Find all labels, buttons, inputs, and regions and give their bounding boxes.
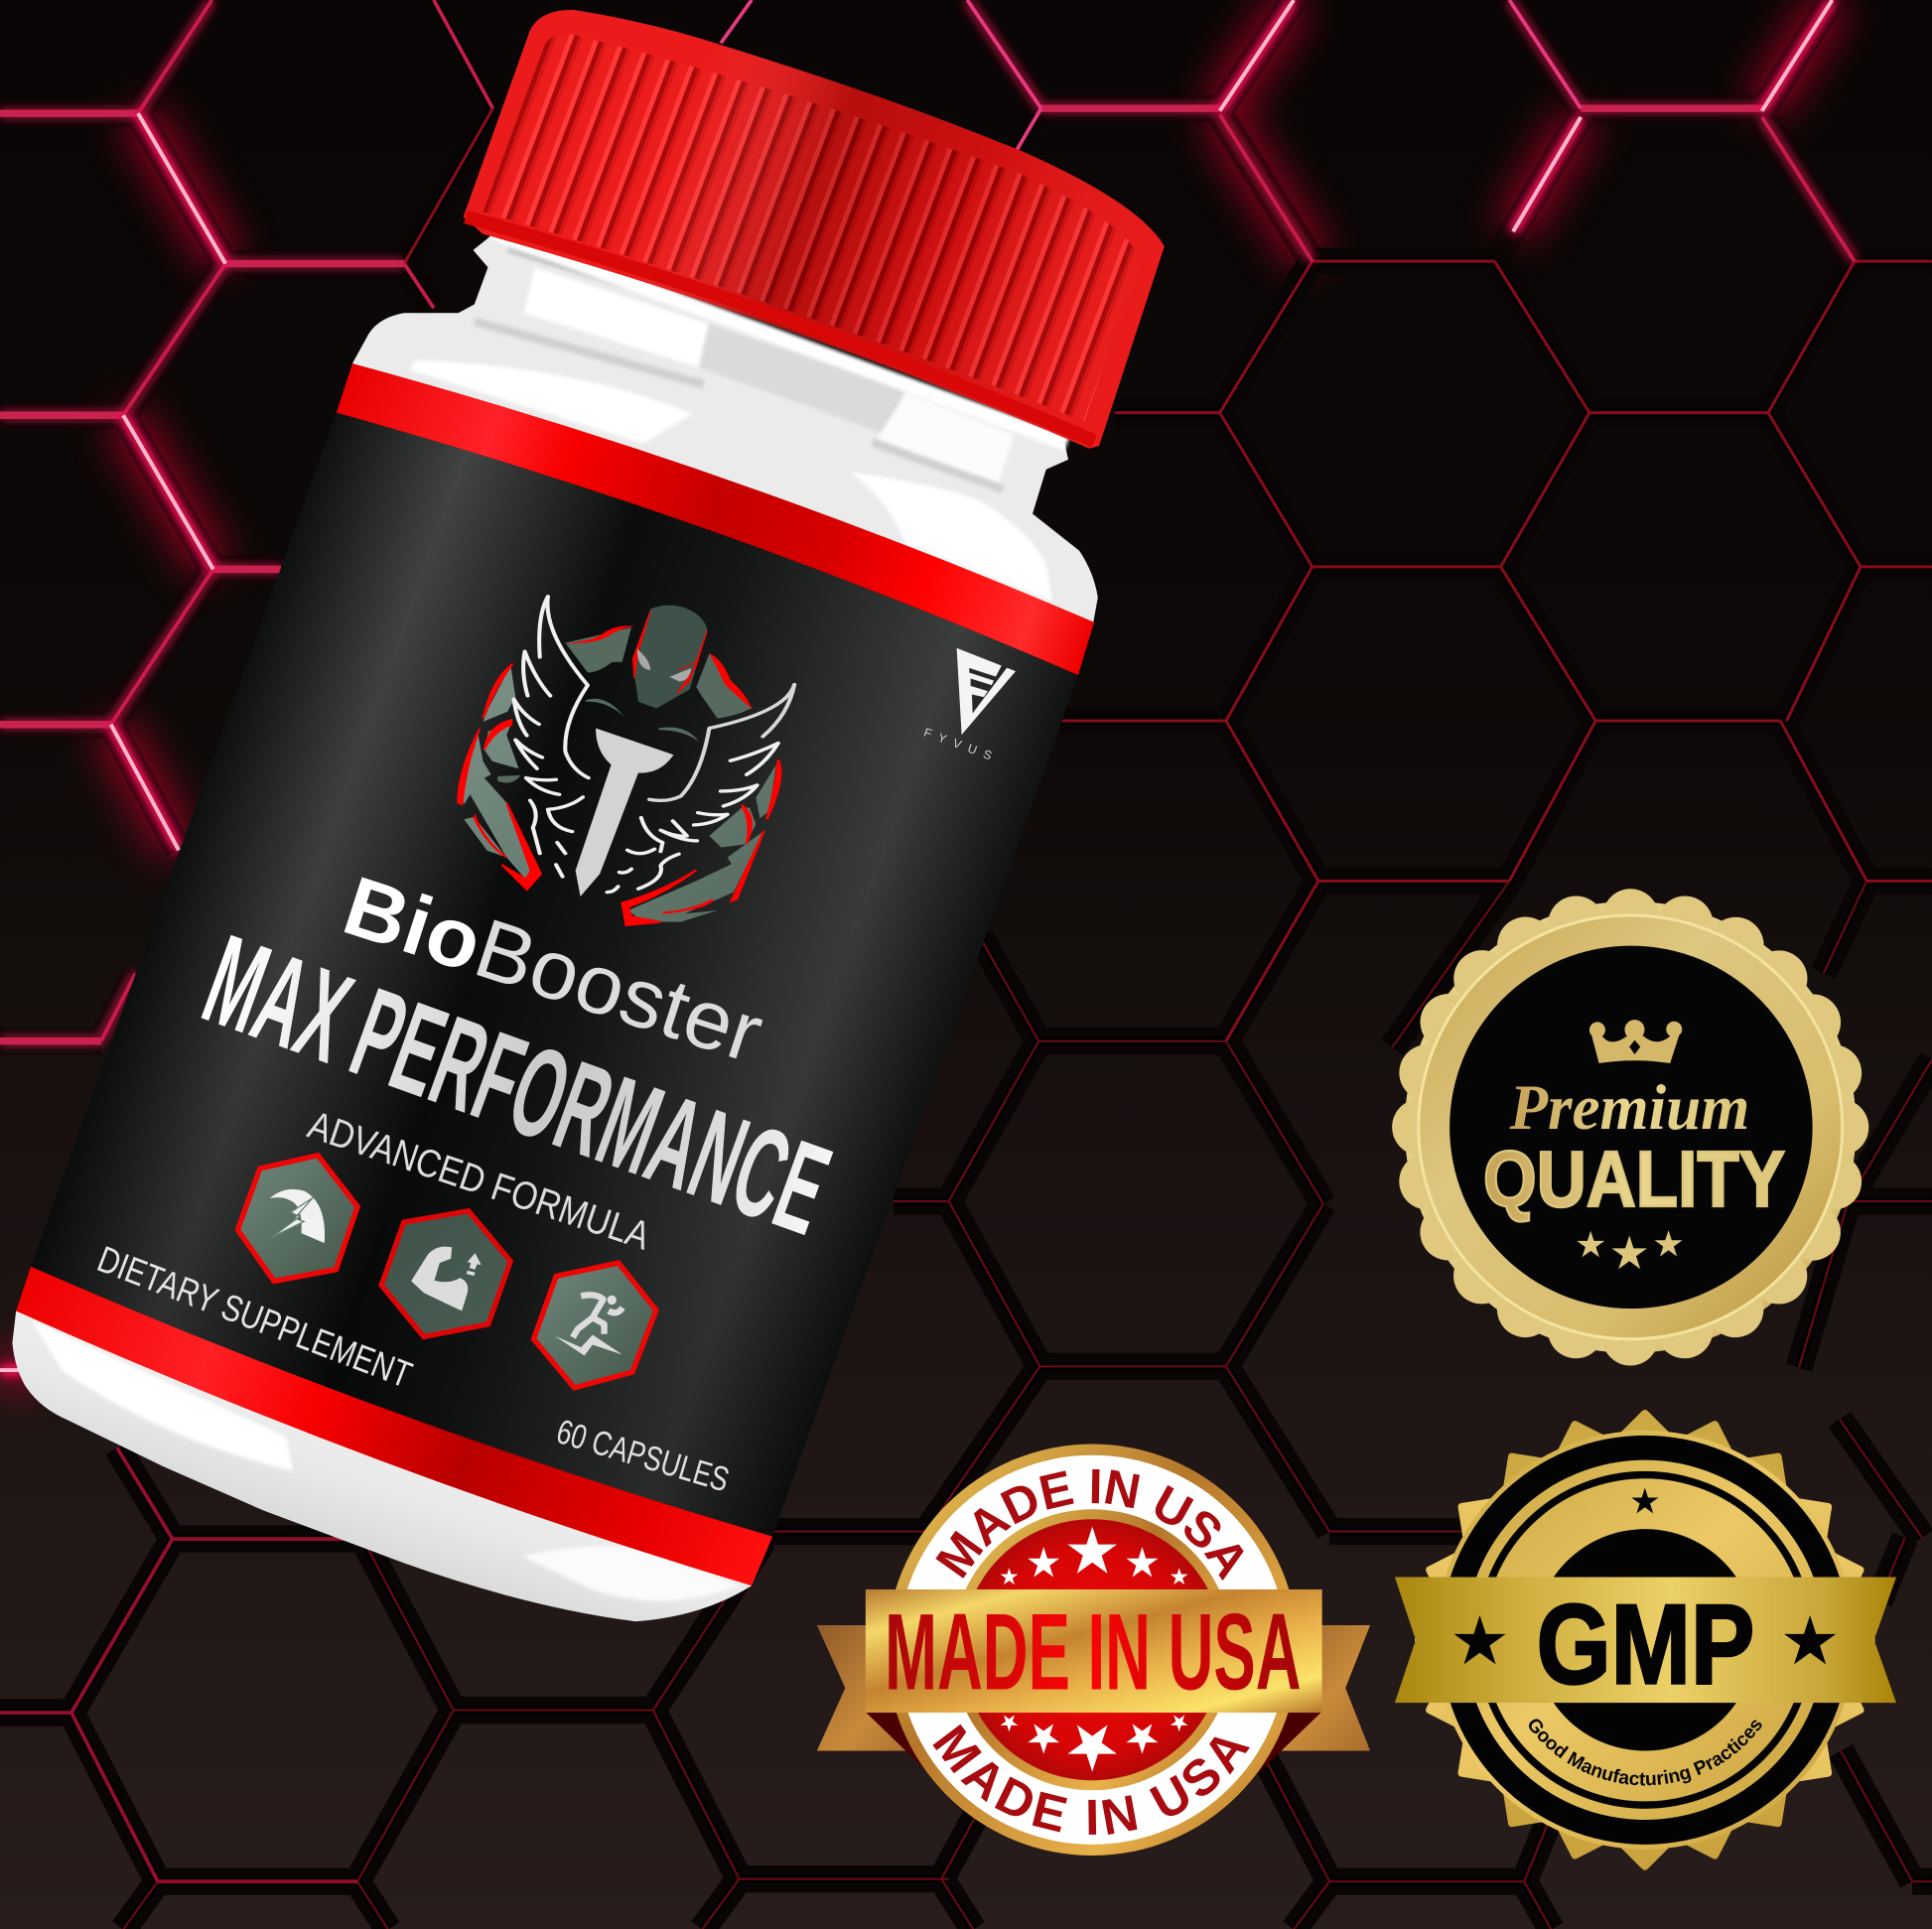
product name: MAX PERFORMANCE: MAX PERFORMANCE	[188, 908, 846, 1262]
black center disc	[1449, 946, 1813, 1309]
warrior right arm	[622, 759, 780, 925]
logo: winged warrior and nail	[458, 597, 794, 925]
FYVUS triangle icon	[957, 648, 1016, 735]
bottle neck and shoulders	[352, 221, 1098, 624]
icon: energy helmet with lightning	[237, 1156, 357, 1281]
red center	[962, 1519, 1223, 1780]
text: QUALITY: QUALITY	[1483, 1135, 1785, 1223]
badge: Made in USA	[816, 1444, 1370, 1856]
gold ring	[1465, 1460, 1825, 1820]
ribbon stars	[1454, 1615, 1836, 1664]
white ring	[897, 1455, 1287, 1845]
gold inner ring	[1419, 915, 1843, 1339]
benefit icons row	[237, 1156, 656, 1388]
text: MADE IN USA: MADE IN USA	[885, 1591, 1302, 1713]
brand mark: FYVUS	[922, 648, 1016, 762]
gold outer ring	[887, 1445, 1298, 1856]
medium neon edges	[0, 0, 1855, 1041]
text: GMP: GMP	[1537, 1582, 1754, 1708]
curved text bottom: MADE IN USA	[933, 1723, 1250, 1835]
three stars	[1577, 1230, 1683, 1269]
badge: GMP	[1394, 1410, 1896, 1870]
FYVUS wordmark: FYVUS	[922, 726, 994, 762]
curved text top: MADE IN USA	[935, 1469, 1244, 1581]
top star	[1631, 1488, 1658, 1513]
badge: Premium Quality	[1405, 901, 1857, 1353]
product name: BioBooster: BioBooster	[334, 859, 773, 1080]
thin black ring	[1480, 1475, 1810, 1805]
bright neon edges	[0, 0, 1832, 1370]
back ribbon	[817, 1625, 1370, 1780]
subtitle: ADVANCED FORMULA: ADVANCED FORMULA	[303, 1103, 655, 1259]
inner gold ring	[952, 1509, 1233, 1790]
warrior left arm	[458, 664, 541, 890]
upper red band	[337, 363, 1094, 675]
label text: DIETARY SUPPLEMENT: DIETARY SUPPLEMENT	[92, 1238, 418, 1396]
text: Good Manufacturing Practices: Good Manufacturing Practices	[1529, 1720, 1761, 1785]
scalloped gold seal	[1405, 901, 1857, 1353]
dim red hex edges	[404, 0, 1932, 1041]
black center	[1534, 1529, 1756, 1751]
black outer ring	[1441, 1436, 1850, 1845]
black label	[31, 413, 1078, 1537]
lower white bottle base	[12, 1310, 752, 1621]
icon: flexed bicep with arrow	[381, 1211, 510, 1336]
label text: 60 CAPSULES: 60 CAPSULES	[552, 1413, 733, 1499]
front ribbon	[866, 1589, 1322, 1713]
icon: runner	[534, 1263, 656, 1388]
stars top and bottom	[1001, 1527, 1188, 1772]
text: Premium: Premium	[1509, 1072, 1749, 1144]
nail	[576, 729, 673, 896]
red ribbed cap	[464, 10, 1165, 449]
warrior head	[632, 606, 707, 709]
ribbon	[1395, 1578, 1896, 1703]
icon: crown	[1589, 1020, 1682, 1063]
supplement bottle	[12, 10, 1165, 1621]
red ambient glow around neon lines	[0, 0, 1832, 1370]
warrior shoulders	[565, 625, 753, 719]
lower red band	[16, 1267, 772, 1585]
wings	[514, 597, 794, 893]
chest marks	[497, 699, 699, 782]
gold spiked seal	[1413, 1408, 1876, 1871]
